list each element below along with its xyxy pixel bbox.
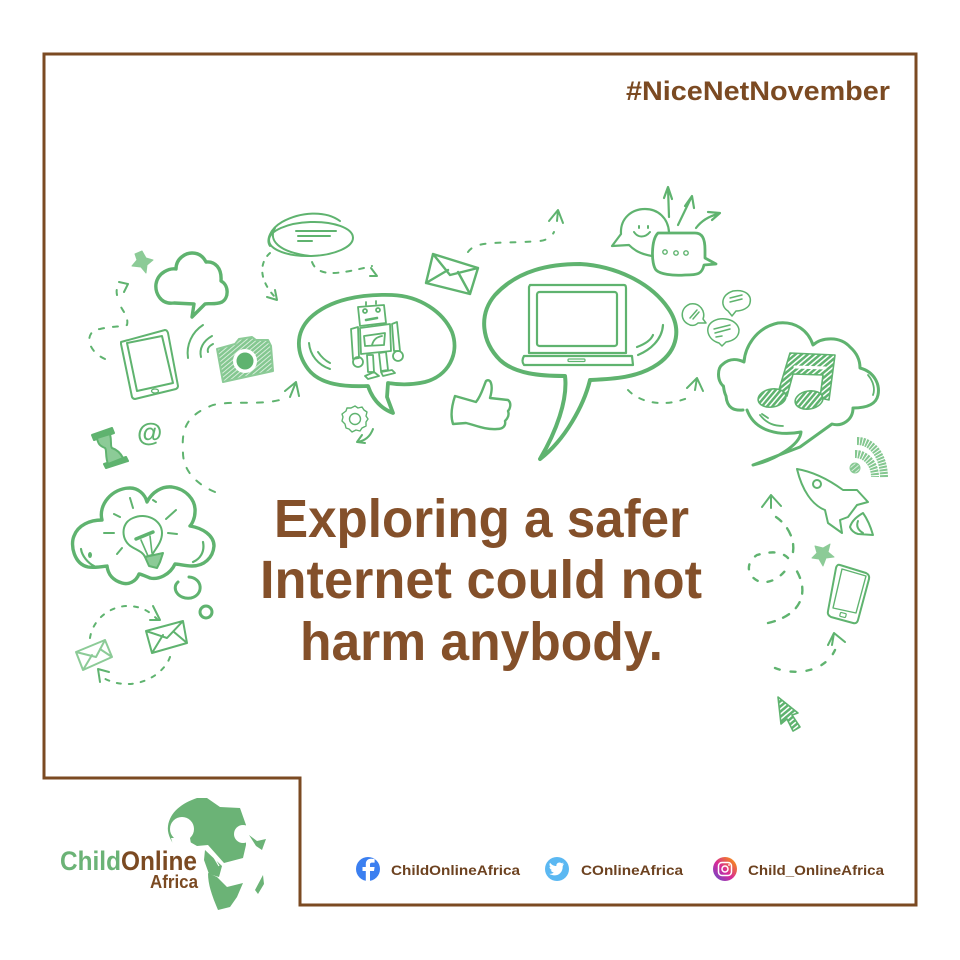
instagram handle: Child_OnlineAfrica: [748, 862, 884, 878]
main heading: [260, 489, 702, 672]
dashed arrow after laptop: [628, 378, 703, 403]
panel: robot speech bubble: [299, 295, 454, 413]
icon: rocket: [797, 469, 873, 535]
icon: speech cloud: [156, 253, 227, 317]
icon: scribble oval: [268, 214, 354, 257]
dashed circle between envelopes: [90, 606, 170, 684]
icon: instagram: [713, 857, 737, 881]
icon: lightbulb thought cloud: [73, 487, 214, 584]
dashed arrow left: [89, 282, 128, 359]
icon: smiley chat bubble: [612, 209, 669, 256]
twitter handle: COnlineAfrica: [581, 862, 683, 878]
logo africa map: [168, 798, 266, 910]
icon: small chat bubbles: [682, 291, 750, 346]
logo wordmark: Africa: [150, 872, 199, 892]
icon: envelope small: [76, 640, 112, 670]
dashed arrows below oval: [262, 253, 377, 300]
logo: ChildOnline Africa: [60, 798, 266, 910]
icon: thought circles: [175, 577, 212, 618]
dashed arrow to phone: [775, 633, 845, 672]
icon: envelope large: [146, 621, 187, 653]
doodle illustrations: [73, 187, 884, 731]
icon: star left: [132, 251, 153, 273]
icon: envelope top: [426, 254, 478, 294]
panel: laptop speech bubble: [484, 264, 676, 459]
icon: camera: [217, 337, 273, 382]
icon: robot: [351, 301, 403, 379]
main heading: Internet could not: [260, 550, 702, 610]
curved arrow under gear: [357, 429, 373, 443]
hashtag: #NiceNetNovember: [626, 76, 890, 106]
icon: tablet: [121, 330, 178, 399]
icon: dotted chat bubble: [652, 233, 716, 275]
icon: hourglass: [92, 428, 128, 468]
icon: music notes: [757, 353, 835, 411]
icon: wifi waves: [188, 325, 213, 358]
icon: three up arrows: [664, 187, 720, 228]
dashed arrow to robot bubble: [183, 382, 299, 492]
main heading: harm anybody.: [300, 612, 663, 672]
icon: smartphone: [828, 565, 869, 623]
dashed arrow top: [468, 210, 563, 252]
icon: twitter: [545, 857, 569, 881]
icon: gear: [342, 406, 368, 432]
dashed arrow right up: [749, 495, 802, 623]
icon: rss signal: [850, 441, 884, 478]
main heading: Exploring a safer: [274, 489, 689, 549]
icon: cursor arrow: [778, 697, 800, 731]
icon: star right: [812, 544, 834, 566]
icon: thumbs up: [452, 380, 510, 429]
icon: laptop: [522, 285, 633, 365]
facebook handle: ChildOnlineAfrica: [391, 862, 520, 878]
icon: at sign: @: [137, 417, 162, 447]
logo wordmark: Online: [121, 846, 197, 876]
social handles: [356, 857, 884, 881]
icon: facebook: [356, 857, 380, 881]
panel: music cloud bubble: [718, 323, 878, 465]
logo wordmark: [60, 846, 199, 892]
logo wordmark: Child: [60, 846, 121, 876]
